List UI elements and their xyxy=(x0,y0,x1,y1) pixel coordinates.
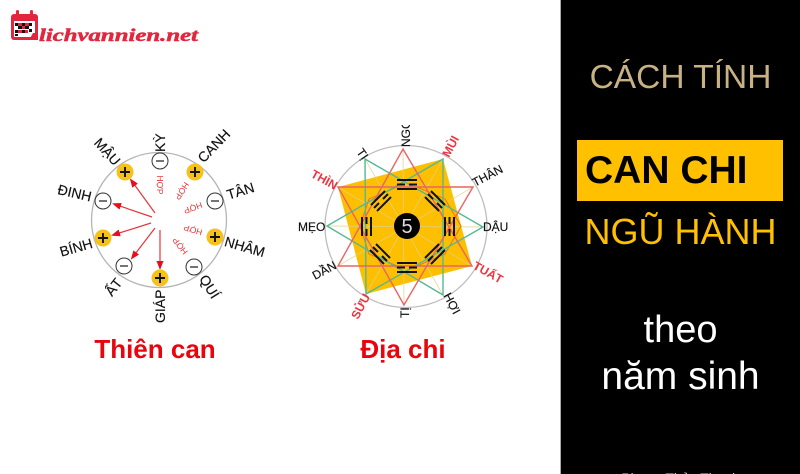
labels: earthly branches: TỊ xyxy=(354,146,371,162)
labels: heavenly stems: NHÂM xyxy=(223,233,267,260)
labels: earthly branches: MẸO xyxy=(298,220,325,234)
labels: heavenly stems: CANH xyxy=(194,126,233,166)
labels: heavenly stems: TÂN xyxy=(225,179,256,203)
labels: earthly branches: THÂN xyxy=(469,161,505,190)
title line: năm sinh: năm sinh xyxy=(601,355,760,398)
center number 5: 5 xyxy=(401,216,413,238)
logo: lichvannien.net xyxy=(11,10,199,45)
chart: Địa chi wheel: MÙI xyxy=(438,133,462,159)
labels: hợp xyxy=(155,175,204,257)
labels: heavenly stems: ĐINH xyxy=(56,181,93,204)
labels: heavenly stems: ẤT xyxy=(102,275,126,299)
labels: earthly branches: HỢI xyxy=(440,290,463,317)
chart: Địa chi wheel xyxy=(298,125,508,321)
trigrams xyxy=(362,180,454,272)
title line: NGŨ HÀNH: NGŨ HÀNH xyxy=(584,211,776,252)
labels: heavenly stems xyxy=(56,126,267,323)
chart: Địa chi wheel: TUẤT xyxy=(471,258,506,287)
labels: hợp: HỢP xyxy=(182,222,204,238)
panel: title sidebar xyxy=(560,0,800,474)
octagon xyxy=(360,187,461,266)
labels: earthly branches xyxy=(298,120,508,318)
highlight: CAN CHI: CAN CHI xyxy=(585,149,748,192)
labels: earthly branches: TỊ xyxy=(398,307,412,318)
labels: hợp: HỢP xyxy=(182,200,204,216)
highlight: CAN CHI xyxy=(577,140,783,201)
markers: plus and minus xyxy=(94,153,224,286)
labels: hợp: HỢP xyxy=(155,175,165,195)
chart: Thiên can wheel xyxy=(56,126,267,323)
chart: Địa chi wheel: THÌN xyxy=(309,166,340,193)
title line: theo: theo xyxy=(644,309,717,351)
chart: Địa chi wheel: SỬU xyxy=(347,291,373,321)
green triangles xyxy=(327,159,483,295)
arrows xyxy=(113,180,160,268)
logo wordmark: lichvannien.net xyxy=(39,25,199,45)
red triangles xyxy=(338,149,473,305)
spokes xyxy=(327,149,483,305)
title line: CÁCH TÍNH: CÁCH TÍNH xyxy=(590,59,771,96)
yellow square xyxy=(338,159,472,294)
heading: Thiên can: Thiên can xyxy=(94,334,216,364)
center number 5 xyxy=(394,213,420,239)
labels: heavenly stems: QUÍ xyxy=(196,272,223,301)
icon: calendar xyxy=(11,10,38,40)
labels: earthly branches: DẬU xyxy=(483,219,508,234)
heading: Địa chi: Địa chi xyxy=(360,334,446,364)
labels: heavenly stems: MẬU xyxy=(91,135,124,168)
labels: heavenly stems: BÍNH xyxy=(58,235,94,260)
labels: hợp: HỢP xyxy=(172,180,191,202)
labels: earthly branches: DẦN xyxy=(309,258,339,283)
labels: heavenly stems: KỲ xyxy=(152,133,168,152)
labels: heavenly stems: GIÁP xyxy=(152,290,168,323)
labels: hợp: HỢP xyxy=(170,235,190,257)
